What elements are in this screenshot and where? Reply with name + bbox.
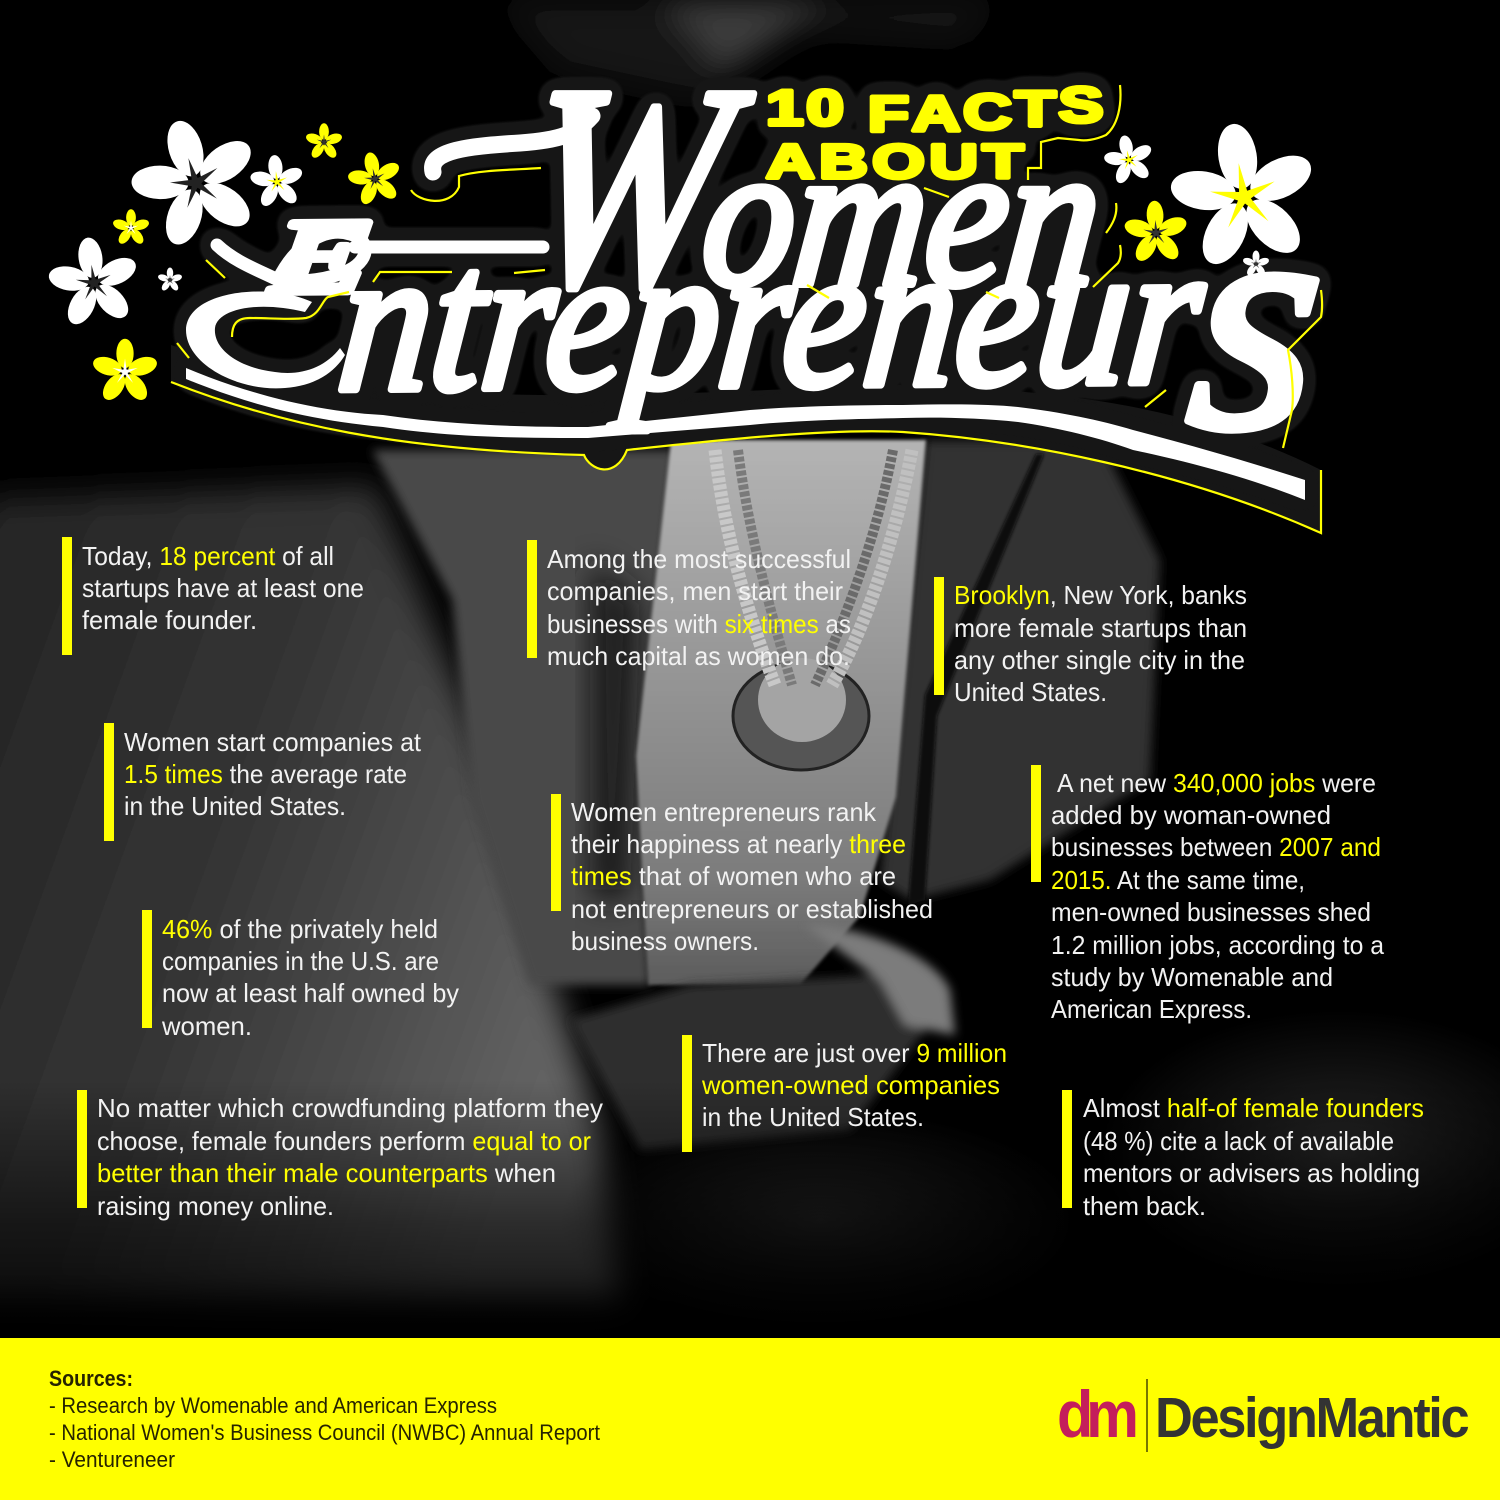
fact: six times capital: much capital as women do. [547, 641, 850, 671]
fact: Brooklyn: Brooklyn, New York, banks [954, 580, 1247, 610]
fact: 340,000 jobs: American Express. [1051, 994, 1252, 1024]
flower: large white left [114, 102, 278, 262]
E flourish [217, 232, 543, 281]
heading: entrepreneurs: s [1177, 141, 1339, 497]
fact: 46% [142, 910, 459, 1041]
flower: tiny white left [157, 268, 183, 292]
fact: half of female founders: mentors or advisers as holding [1083, 1158, 1420, 1188]
fact: 340,000 jobs: study by Womenable and [1051, 962, 1333, 992]
flower: medium white left [41, 231, 147, 333]
flower: yellow right [1121, 199, 1191, 266]
flower: small yellow left [112, 209, 150, 246]
fact: 340,000 jobs: businesses between 2007 and [1051, 832, 1381, 862]
fact: 18 percent: startups have at least one [82, 573, 364, 603]
fact: six times capital [527, 540, 851, 671]
table shadows [1100, 1010, 1500, 1290]
fact: six times capital: companies, men start their [547, 576, 843, 606]
fact: half of female founders: (48 %) cite a lack of available [1083, 1126, 1394, 1156]
fact: 340,000 jobs: A net new 340,000 jobs were [1057, 768, 1376, 798]
fact: happiness: Women entrepreneurs rank [571, 797, 877, 827]
fact: crowdfunding: choose, female founders perform equal to or [97, 1126, 591, 1156]
footer band [0, 1338, 1500, 1500]
flower: large white right [1157, 112, 1330, 279]
sources: - National Women's Business Council (NWBC) Annual Report [49, 1420, 600, 1445]
fact: 46%: women. [161, 1011, 252, 1041]
fact: 18 percent [62, 537, 364, 655]
fact: half of female founders [1062, 1090, 1424, 1221]
fact: happiness: not entrepreneurs or established [571, 894, 933, 924]
fact: crowdfunding: better than their male counterparts when [97, 1158, 556, 1188]
fact: happiness: their happiness at nearly three [571, 829, 906, 859]
flower: small white [246, 152, 307, 211]
fact: 340,000 jobs: 2015. At the same time, [1051, 865, 1305, 895]
cuff and hands [570, 925, 955, 1150]
jacket left [372, 450, 675, 985]
logo: DesignMantic: DesignMantic [1155, 1385, 1470, 1449]
shirt [636, 440, 926, 985]
heading: 10 facts about: 10 FACTS [766, 77, 1103, 142]
fact: 340,000 jobs: men-owned businesses shed [1051, 897, 1371, 927]
flowers [41, 102, 1330, 404]
logo: DesignMantic [1057, 1378, 1470, 1452]
sources: - Research by Womenable and American Express [49, 1393, 497, 1418]
fact: happiness: business owners. [571, 926, 759, 956]
pendant [733, 658, 869, 770]
jacket right [880, 440, 1160, 900]
flower: yellow bottom left [91, 339, 159, 404]
fact: 18 percent: Today, 18 percent of all [82, 541, 334, 571]
fact: crowdfunding: No matter which crowdfunding platform they [97, 1093, 603, 1123]
sources: - Ventureneer [49, 1447, 175, 1472]
fact: crowdfunding: raising money online. [97, 1191, 334, 1221]
fact: six times capital: businesses with six times as [547, 609, 851, 639]
laptop [0, 485, 620, 1300]
flower: tiny white right [1242, 250, 1270, 277]
yellow title outlines [171, 85, 1322, 533]
fact: 9 million: women-owned companies [701, 1070, 1000, 1100]
swash underline [186, 368, 1305, 500]
title lockup [186, 26, 1339, 505]
hair and neck [500, 0, 1000, 100]
lapel shadow [908, 454, 1044, 905]
fact: 340,000 jobs: added by woman-owned [1051, 800, 1331, 830]
fact: 340,000 jobs: 1.2 million jobs, according to a [1051, 930, 1385, 960]
flower: yellow [342, 147, 408, 210]
fact: crowdfunding [77, 1090, 603, 1221]
heading: 10 facts about: ABOUT [766, 135, 1024, 189]
fact: 1.5 times: 1.5 times the average rate [124, 759, 407, 789]
fact: 9 million: in the United States. [702, 1102, 924, 1132]
fact: 46%: companies in the U.S. are [162, 946, 439, 976]
sources [49, 1366, 600, 1472]
fact: 46%: 46% of the privately held [162, 914, 438, 944]
fact: 9 million [682, 1035, 1007, 1152]
W flourish [433, 116, 592, 172]
lower fade [0, 1080, 1500, 1340]
fact: Brooklyn [934, 577, 1247, 707]
heading: entrepreneurs: ntrepreneur [331, 200, 1213, 434]
heading: women: W [511, 26, 764, 347]
fact: Brooklyn: more female startups than [954, 613, 1247, 643]
heading: entrepreneurs: E [266, 197, 372, 315]
heading: women: omen [693, 103, 1112, 329]
fact: six times capital: Among the most successful [547, 544, 851, 574]
fact: Brooklyn: United States. [954, 677, 1107, 707]
fact: 340,000 jobs [1031, 765, 1385, 1024]
E bowl [186, 291, 345, 388]
fact: 1.5 times [104, 723, 422, 841]
sources: Sources: [49, 1366, 133, 1391]
logo: DesignMantic: dm [1057, 1378, 1139, 1452]
fact: 1.5 times: in the United States. [124, 791, 346, 821]
fact: 18 percent: female founder. [82, 605, 257, 635]
heading: 10 facts about [766, 77, 1104, 189]
fact: happiness: times that of women who are [571, 861, 896, 891]
fact: 46%: now at least half owned by [162, 978, 459, 1008]
fact: half of female founders: them back. [1083, 1191, 1206, 1221]
fact: Brooklyn: any other single city in the [954, 645, 1245, 675]
fact: half of female founders: Almost half-of female founders [1083, 1093, 1424, 1123]
necklace [715, 450, 912, 685]
flower: small white right [1099, 130, 1159, 189]
fact: happiness [551, 794, 933, 956]
flower: small yellow top [305, 123, 343, 160]
fact: 1.5 times: Women start companies at [124, 727, 422, 757]
fact: 9 million: There are just over 9 million [702, 1038, 1007, 1068]
title backing swash [171, 345, 1321, 533]
